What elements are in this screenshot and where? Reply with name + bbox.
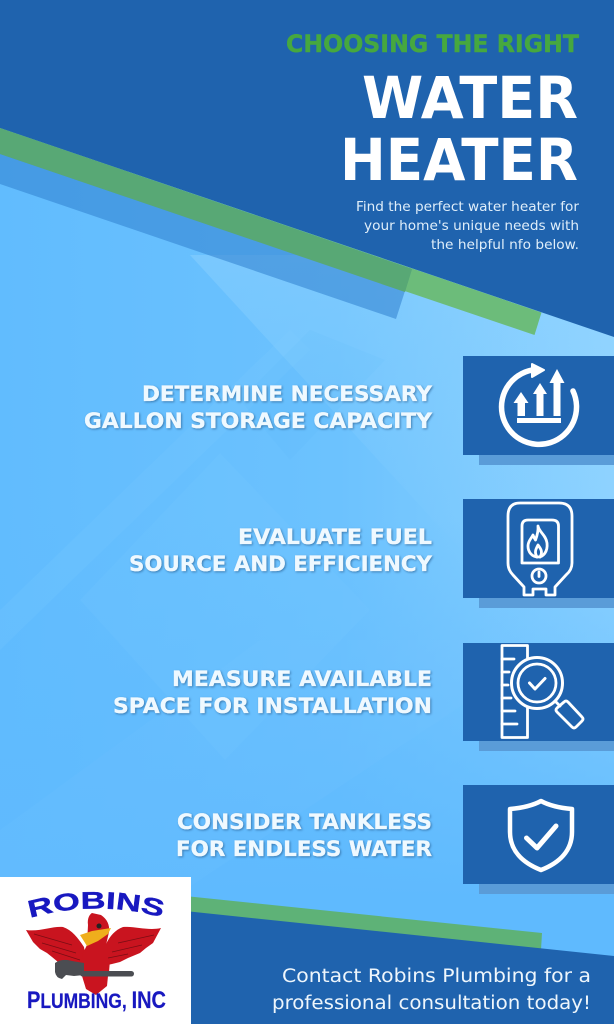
item 3 label: MEASURE AVAILABLE [172,667,432,692]
icon panel 1: capacity [463,356,614,465]
icon panel 3: measure [463,643,614,751]
item 2 label: SOURCE AND EFFICIENCY [129,552,432,577]
logo bird: wings [26,913,161,995]
logo bird: eye [96,924,102,928]
intro text: the helpful nfo below. [431,237,579,253]
item 4 label [176,810,432,862]
item 1 label [84,382,432,434]
icon panel 4: tankless [463,785,614,894]
logo bird: beak [80,928,111,946]
footer call to action: professional consultation today! [272,993,591,1014]
title [340,64,578,194]
top dark blue header shape [0,0,614,337]
icon panel 2: fuel [463,499,614,608]
green ribbon, top [0,128,542,335]
logo: pipe wrench [55,960,134,979]
footer call to action [272,966,591,1014]
title: WATER [362,64,578,132]
item 1 label: DETERMINE NECESSARY [142,382,432,407]
item 1 label: GALLON STORAGE CAPACITY [84,409,432,434]
footer call to action: Contact Robins Plumbing for a [282,966,591,987]
item 2 label [129,525,432,577]
intro text: Find the perfect water heater for [356,199,579,215]
bottom dark blue footer shape [185,911,614,1024]
green over-tint on ribbon overlap [0,128,412,292]
translucent blue ribbon, top [0,128,412,319]
icon: rising arrows in circular arrow [502,364,577,444]
logo panel: Robins Plumbing [0,877,191,1024]
icon: ruler and magnifier [502,646,583,738]
item 2 label: EVALUATE FUEL [238,525,432,550]
icon: shield with check [510,801,572,870]
logo wordmark: ROBINS: ROBINS [28,892,164,918]
icon: water heater with flame [508,503,572,595]
bottom green ribbon [185,896,542,950]
logo wordmark: PLUMBING, INC: PLUMBING, INC [27,987,166,1014]
subtitle heading: CHOOSING THE RIGHT [286,30,580,58]
item 3 label: SPACE FOR INSTALLATION [113,694,432,719]
item 4 label: CONSIDER TANKLESS [177,810,432,835]
item 4 label: FOR ENDLESS WATER [176,837,432,862]
title: HEATER [340,126,578,194]
logo bird: wing feathers [34,934,154,960]
intro text: your home's unique needs with [364,218,579,234]
item 3 label [113,667,432,719]
intro text [356,199,579,253]
